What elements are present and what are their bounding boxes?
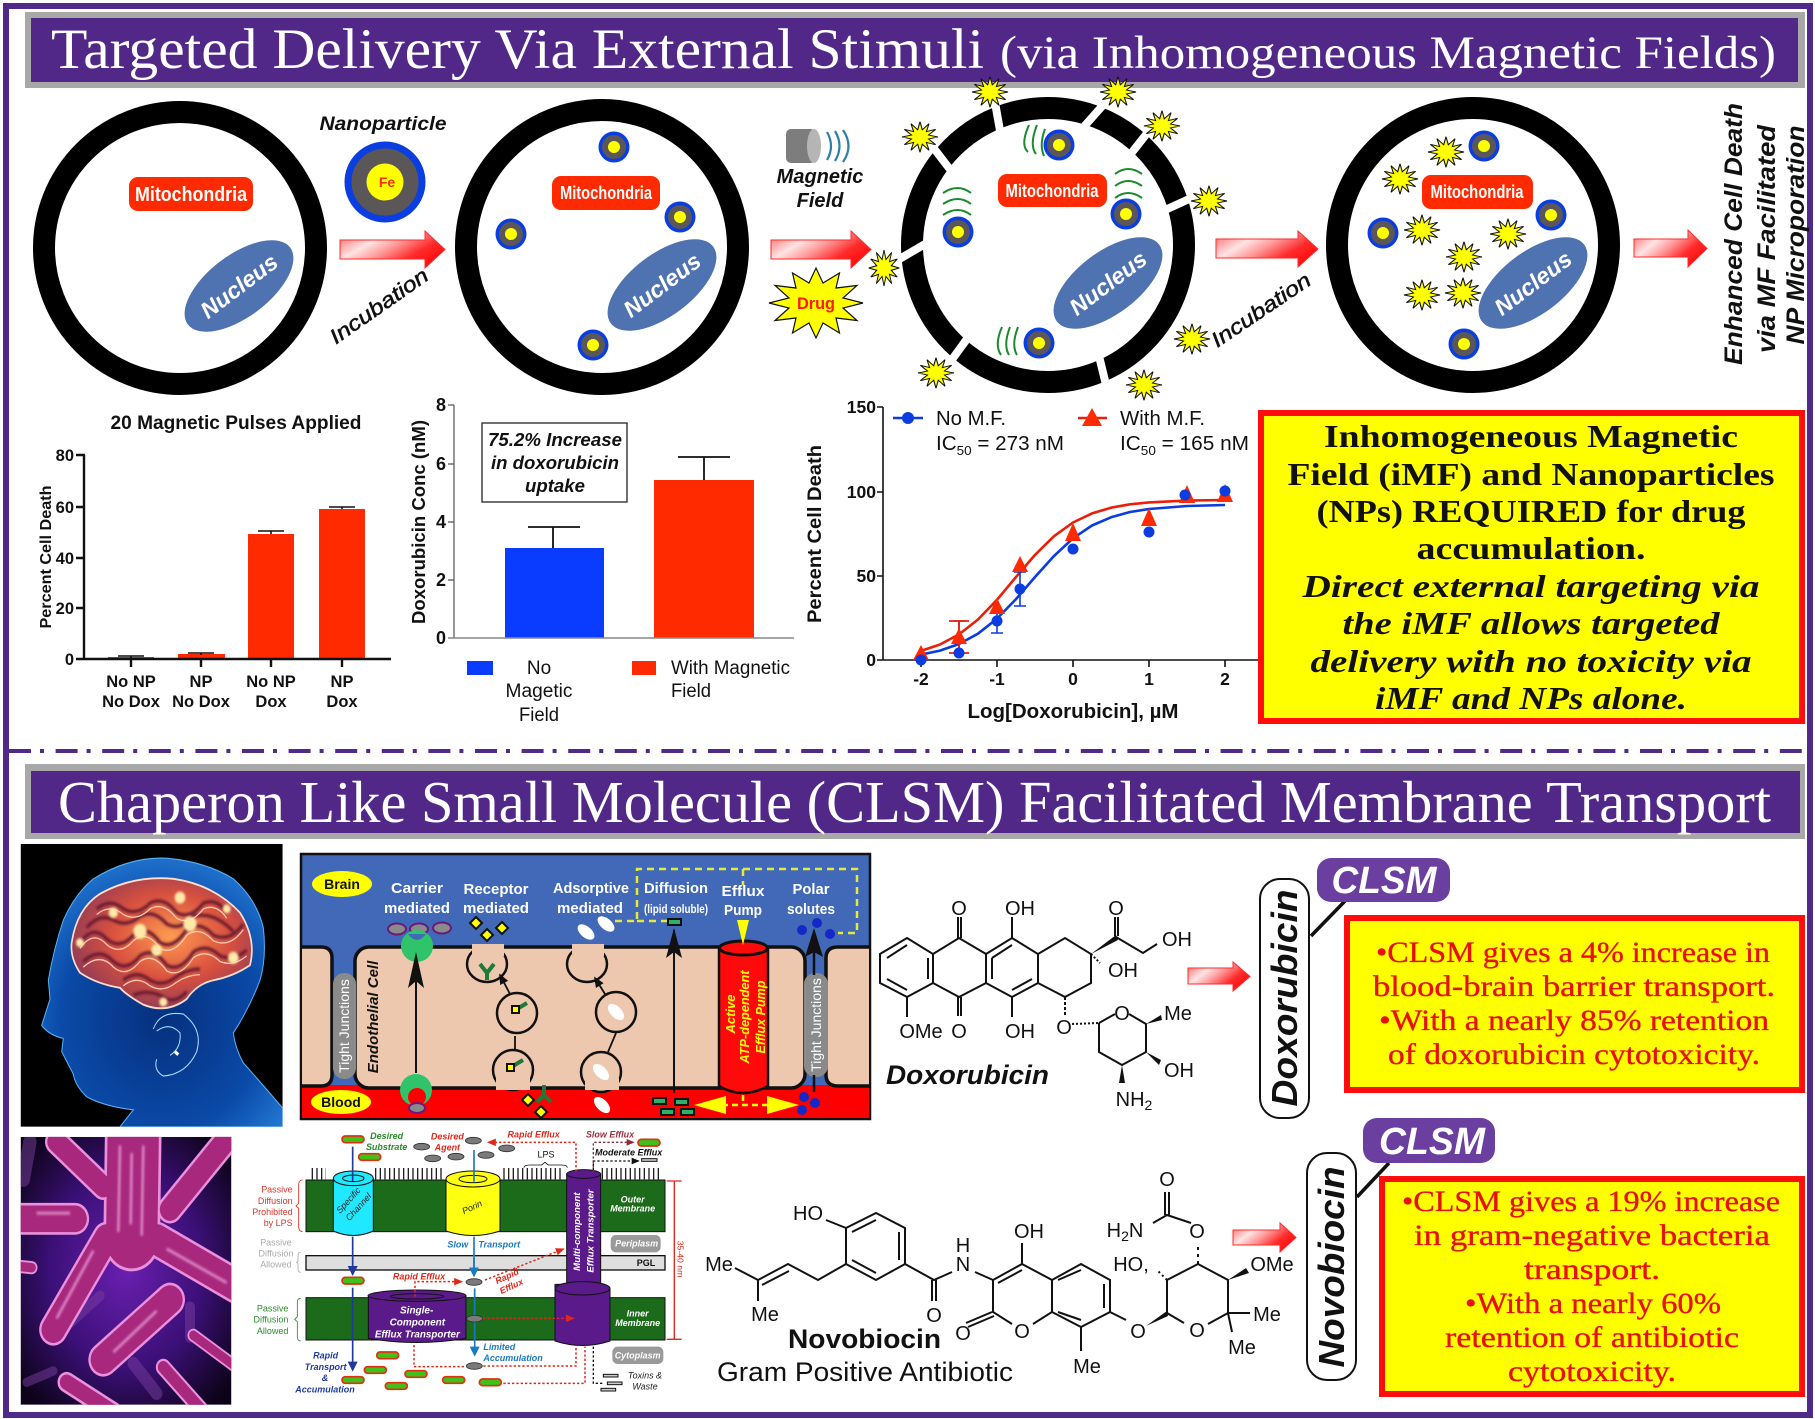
bar chart: percent cell death: No NP bbox=[106, 673, 156, 691]
arrow: doxorubicin to result bbox=[1188, 962, 1250, 991]
outcome text: via MF Facilitated bbox=[1753, 124, 1781, 353]
mitochondria label: Mitochondria bbox=[1430, 182, 1524, 202]
chemical structure: doxorubicin: OH bbox=[1108, 960, 1138, 982]
brain and blood labels: Brain bbox=[324, 876, 360, 892]
callout: iMF and NPs required: Direct external targeting via bbox=[1301, 568, 1760, 604]
result box: novobiocin: retention of antibiotic bbox=[1445, 1321, 1739, 1354]
compartment labels: PGL bbox=[637, 1258, 656, 1268]
specific channel: Channel bbox=[344, 1190, 374, 1223]
legend bbox=[893, 408, 1249, 458]
efflux pump: ATP-dependent bbox=[737, 970, 752, 1064]
flow labels bbox=[294, 1130, 663, 1394]
flow labels: Accumulation bbox=[294, 1384, 355, 1394]
flow labels: LPS bbox=[538, 1149, 554, 1159]
efflux pump: Efflux Pump bbox=[753, 980, 768, 1054]
flow labels: Rapid bbox=[494, 1266, 521, 1286]
callout: iMF and NPs required bbox=[1261, 413, 1802, 721]
endothelial cells bbox=[302, 947, 869, 1088]
pill: doxorubicin: Doxorubicin bbox=[1264, 890, 1305, 1106]
arrow: incubation 2 bbox=[1216, 231, 1318, 267]
flow labels: Transport bbox=[478, 1240, 521, 1250]
result box: novobiocin: cytotoxicity. bbox=[1508, 1355, 1676, 1388]
callout: iMF and NPs required: delivery with no toxicity via bbox=[1310, 643, 1752, 679]
efflux pump: Active bbox=[723, 994, 738, 1035]
label: incubation 1: Incubation bbox=[326, 264, 433, 349]
route labels: Adsorptive bbox=[553, 880, 629, 897]
tight junctions: Tight Junctions bbox=[336, 979, 352, 1073]
specific channel: Specific bbox=[334, 1185, 363, 1215]
panel: cell before incubation bbox=[44, 112, 316, 384]
name: doxorubicin: Doxorubicin bbox=[886, 1060, 1049, 1090]
label: magnetic field bbox=[777, 166, 863, 212]
dose response chart: 50 bbox=[857, 566, 876, 586]
arrow: to outcome bbox=[1634, 230, 1707, 267]
nucleus bbox=[592, 222, 732, 348]
icon: magnet field source bbox=[786, 129, 848, 163]
bar chart: percent cell death: Dox bbox=[255, 693, 287, 711]
legend: Field bbox=[519, 705, 559, 726]
chemical structure: novobiocin: O bbox=[1189, 1320, 1205, 1342]
result box: doxorubicin bbox=[1347, 918, 1802, 1090]
red triangle data points bbox=[913, 484, 1233, 660]
dose response chart: 1 bbox=[1144, 669, 1154, 689]
legend: = 165 nM bbox=[1156, 433, 1249, 455]
chemical structure: novobiocin: O bbox=[1189, 1221, 1205, 1243]
flow labels: Rapid bbox=[313, 1350, 339, 1360]
porin: Porin bbox=[460, 1198, 484, 1216]
chemical structure: novobiocin: O bbox=[926, 1305, 942, 1327]
panel: cell with nanoparticles bbox=[466, 110, 738, 384]
legend: No bbox=[527, 658, 551, 679]
panel: porated cell under magnetic field bbox=[869, 77, 1227, 400]
title banner: targeted delivery: Targeted Delivery Via External Stimuli bbox=[51, 18, 984, 81]
chemical structure: novobiocin: Me bbox=[1253, 1304, 1281, 1326]
bar chart: doxorubicin concentration: 4 bbox=[436, 512, 446, 532]
side labels: Passive bbox=[261, 1185, 293, 1195]
panel: cell with drug accumulated bbox=[1337, 108, 1609, 382]
route labels: mediated bbox=[384, 900, 450, 917]
chemical structure: doxorubicin: O bbox=[1114, 1003, 1130, 1025]
dose response chart: 0 bbox=[866, 650, 876, 670]
side labels: Diffusion bbox=[258, 1196, 293, 1206]
multi-component efflux transporter: Multi-component bbox=[572, 1191, 582, 1271]
nucleus bbox=[1463, 220, 1603, 346]
chemical structure: novobiocin: N bbox=[1129, 1220, 1143, 1242]
nanoparticles with vibration waves bbox=[942, 125, 1142, 358]
chemical structure: doxorubicin: OH bbox=[1005, 898, 1035, 920]
pill: novobiocin: Novobiocin bbox=[1311, 1166, 1352, 1368]
bar chart: doxorubicin concentration: 0 bbox=[436, 628, 446, 648]
badge: CLSM for novobiocin: CLSM bbox=[1379, 1121, 1486, 1163]
porin bbox=[446, 1171, 500, 1235]
image: rod-shaped bacteria bbox=[20, 1136, 232, 1405]
legend bbox=[467, 658, 790, 726]
nanoparticle diagram: Nanoparticle bbox=[320, 114, 447, 135]
callout: 75.2% increase: 75.2% Increase bbox=[488, 429, 622, 450]
chemical structure: doxorubicin: O bbox=[1108, 898, 1124, 920]
legend: 50 bbox=[1141, 443, 1156, 458]
single-component efflux transporter: Efflux Transporter bbox=[375, 1330, 461, 1341]
title banner: CLSM: Chaperon Like Small Molecule (CLSM) Facilitated Membrane Transport bbox=[58, 769, 1772, 835]
flow labels: Slow Efflux bbox=[586, 1130, 635, 1140]
callout line: novobiocin bbox=[1357, 1163, 1389, 1197]
result box: novobiocin: •With a nearly 60% bbox=[1465, 1287, 1721, 1320]
nucleus: Nucleus bbox=[195, 249, 283, 323]
flow labels: Limited bbox=[483, 1342, 516, 1352]
nucleus: Nucleus bbox=[618, 248, 706, 322]
chemical structure: doxorubicin: Me bbox=[1164, 1003, 1192, 1025]
outcome text bbox=[1720, 103, 1810, 365]
side labels: Passive bbox=[260, 1238, 292, 1248]
legend: With M.F. bbox=[1120, 408, 1205, 430]
bar chart: percent cell death: Percent Cell Death bbox=[38, 486, 55, 628]
flow labels: Rapid Efflux bbox=[508, 1130, 561, 1140]
single-component efflux transporter bbox=[368, 1290, 466, 1342]
dose response chart: 100 bbox=[847, 482, 876, 502]
arrow: magnetic field bbox=[771, 231, 871, 268]
chemical structure: novobiocin: OH bbox=[1014, 1221, 1044, 1243]
brain and blood labels bbox=[311, 871, 372, 1114]
bar chart: percent cell death: NP bbox=[190, 673, 212, 691]
flow labels: Accumulation bbox=[482, 1353, 543, 1363]
side labels bbox=[252, 1185, 293, 1336]
nanoparticles bbox=[1368, 130, 1566, 360]
flow labels: Desired bbox=[370, 1131, 404, 1141]
arrow: incubation 1 bbox=[340, 231, 445, 268]
side labels: Allowed bbox=[260, 1260, 292, 1270]
callout line: doxorubicin bbox=[1311, 901, 1345, 936]
arrow: novobiocin to result bbox=[1233, 1223, 1296, 1252]
drug stars bbox=[1382, 137, 1526, 310]
route labels bbox=[384, 880, 835, 919]
flow labels: & bbox=[322, 1373, 328, 1383]
polar solutes route bbox=[797, 918, 835, 1115]
dose response chart: -2 bbox=[913, 669, 929, 689]
legend: No M.F. bbox=[936, 408, 1006, 430]
side labels: Allowed bbox=[257, 1326, 288, 1336]
bar chart: doxorubicin concentration: 2 bbox=[436, 570, 446, 590]
mitochondria label bbox=[552, 176, 660, 210]
chemical structure: novobiocin: H bbox=[1107, 1220, 1121, 1242]
route labels: Carrier bbox=[391, 880, 443, 897]
name: novobiocin: Novobiocin bbox=[788, 1324, 941, 1354]
diffusion route bbox=[653, 919, 694, 1115]
chemical structure: doxorubicin: NH bbox=[1116, 1089, 1145, 1111]
bar chart: doxorubicin concentration bbox=[409, 395, 794, 726]
nanoparticles bbox=[496, 132, 696, 360]
mitochondria label bbox=[129, 177, 253, 211]
side labels: Passive bbox=[257, 1304, 288, 1314]
result box: novobiocin: in gram-negative bacteria bbox=[1414, 1219, 1770, 1252]
route labels: Pump bbox=[724, 902, 762, 919]
chemical structure: novobiocin: N bbox=[956, 1254, 970, 1276]
diagram: blood-brain barrier: Endothelial Cell bbox=[365, 960, 382, 1073]
title banner: targeted delivery: (via Inhomogeneous Magnetic Fields) bbox=[1000, 27, 1776, 79]
bar chart: percent cell death: 0 bbox=[65, 651, 74, 669]
label: magnetic field: Magnetic bbox=[777, 166, 863, 188]
compartment labels: Waste bbox=[632, 1381, 658, 1391]
adsorptive mediated route bbox=[567, 913, 636, 1116]
chemical structure: novobiocin: 2 bbox=[1121, 1228, 1129, 1244]
subtitle: gram positive antibiotic: Gram Positive Antibiotic bbox=[717, 1357, 1013, 1387]
bar chart: percent cell death: No Dox bbox=[102, 693, 161, 711]
nucleus: Nucleus bbox=[1489, 246, 1577, 320]
chemical structure: doxorubicin: O bbox=[1056, 1017, 1072, 1039]
legend: IC bbox=[1120, 433, 1140, 455]
dose response chart: 150 bbox=[847, 397, 876, 417]
chemical structure: novobiocin: O bbox=[1130, 1321, 1146, 1343]
chemical structure: novobiocin: HO bbox=[793, 1203, 823, 1225]
bar chart: doxorubicin concentration: 6 bbox=[436, 454, 446, 474]
flow labels: Inner bbox=[627, 1309, 649, 1319]
bar chart: doxorubicin concentration: 8 bbox=[436, 395, 446, 415]
label: incubation 2: Incubation bbox=[1207, 269, 1315, 352]
callout: iMF and NPs required: the iMF allows targeted bbox=[1342, 605, 1721, 641]
callout: iMF and NPs required: Inhomogeneous Magnetic bbox=[1324, 418, 1738, 454]
tight junctions: Tight Junctions bbox=[808, 978, 824, 1072]
chemical structure: doxorubicin: O bbox=[951, 1021, 967, 1043]
result box: doxorubicin: •With a nearly 85% retention bbox=[1379, 1004, 1769, 1037]
badge: CLSM for doxorubicin: CLSM bbox=[1332, 860, 1438, 902]
route labels: Diffusion bbox=[644, 880, 708, 897]
chemical structure: doxorubicin: OH bbox=[1164, 1060, 1194, 1082]
chemical structure: novobiocin: H bbox=[956, 1235, 970, 1257]
bar chart: percent cell death: 40 bbox=[56, 550, 74, 568]
route labels: Receptor bbox=[464, 881, 529, 898]
chemical structure: novobiocin: HO, bbox=[1113, 1254, 1149, 1276]
agent ellipses bbox=[414, 1137, 515, 1369]
chemical structure: doxorubicin: OH bbox=[1162, 929, 1192, 951]
chemical structure: doxorubicin bbox=[880, 898, 1194, 1113]
nucleus bbox=[169, 223, 309, 349]
flow labels: Moderate Efflux bbox=[595, 1148, 663, 1158]
compartment labels: Toxins & bbox=[628, 1370, 662, 1380]
flow labels: Outer bbox=[621, 1194, 645, 1204]
chemical structure: novobiocin: Me bbox=[705, 1254, 733, 1276]
compartment labels: Periplasm bbox=[615, 1239, 658, 1249]
chemical structure: novobiocin: Me bbox=[1228, 1337, 1256, 1359]
callout: iMF and NPs required: Field (iMF) and Nanoparticles bbox=[1288, 456, 1774, 492]
diagram: blood-brain barrier bbox=[301, 854, 870, 1119]
bar chart: percent cell death: NP bbox=[331, 673, 353, 691]
chemical structure: novobiocin: Me bbox=[1073, 1356, 1101, 1378]
dose response chart bbox=[804, 397, 1258, 723]
compartment labels: 35-40 nm bbox=[676, 1241, 686, 1277]
chemical structure: novobiocin: O bbox=[1014, 1321, 1030, 1343]
mitochondria label: Mitochondria bbox=[135, 184, 248, 206]
callout: 75.2% increase bbox=[482, 423, 627, 502]
bar chart: percent cell death: No Dox bbox=[172, 693, 231, 711]
drug stars entering pores bbox=[869, 77, 1227, 400]
callout: 75.2% increase: in doxorubicin bbox=[491, 452, 619, 473]
dose response chart: -1 bbox=[989, 669, 1005, 689]
single-component efflux transporter: Component bbox=[390, 1318, 446, 1329]
diagram: gram-negative bacterial envelope bbox=[252, 1130, 686, 1394]
specific channel bbox=[333, 1171, 374, 1235]
result box: novobiocin bbox=[1382, 1179, 1802, 1394]
bar chart: percent cell death: Dox bbox=[326, 693, 358, 711]
chemical structure: doxorubicin: OMe bbox=[899, 1021, 943, 1043]
drug starburst: Drug bbox=[797, 294, 835, 313]
result box: novobiocin: •CLSM gives a 19% increase bbox=[1402, 1185, 1780, 1218]
side labels: Prohibited bbox=[252, 1207, 293, 1217]
legend: With Magnetic bbox=[671, 658, 790, 679]
ear bbox=[153, 1013, 198, 1076]
chemical structure: novobiocin: Me bbox=[751, 1304, 779, 1326]
legend: Field bbox=[671, 681, 711, 702]
flow labels: Rapid Efflux bbox=[393, 1272, 446, 1282]
outcome text: Enhanced Cell Death bbox=[1720, 103, 1748, 365]
multi-component efflux transporter: Efflux Transporter bbox=[585, 1189, 595, 1273]
legend: 50 bbox=[957, 443, 972, 458]
label: magnetic field: Field bbox=[797, 190, 844, 212]
drug starburst bbox=[769, 268, 863, 338]
route labels: mediated bbox=[557, 900, 623, 917]
chemical structure: novobiocin: O bbox=[1159, 1169, 1175, 1191]
outcome text: NP Microporation bbox=[1782, 126, 1810, 344]
chemical structure: doxorubicin: 2 bbox=[1145, 1097, 1153, 1113]
bar chart: percent cell death: 80 bbox=[56, 447, 74, 465]
bar chart: percent cell death: 20 bbox=[56, 600, 74, 618]
bar chart: doxorubicin concentration: Doxorubicin Conc (nM) bbox=[409, 420, 429, 624]
route labels: Polar bbox=[792, 881, 830, 898]
bar chart: percent cell death: No NP bbox=[246, 673, 296, 691]
result box: novobiocin: transport. bbox=[1524, 1253, 1660, 1286]
chemical structure: novobiocin: O bbox=[955, 1323, 971, 1345]
bar chart: percent cell death: 60 bbox=[56, 499, 74, 517]
chemical structure: doxorubicin: O bbox=[951, 898, 967, 920]
chemical structure: novobiocin bbox=[705, 1169, 1294, 1387]
blue circle data points bbox=[916, 486, 1230, 666]
callout: iMF and NPs required: iMF and NPs alone. bbox=[1375, 680, 1687, 716]
dose response chart: 0 bbox=[1068, 669, 1078, 689]
transport arrows bbox=[353, 1142, 638, 1383]
flow labels: Slow bbox=[447, 1240, 469, 1250]
nanoparticle diagram bbox=[320, 114, 447, 219]
callout: iMF and NPs required: accumulation. bbox=[1416, 530, 1646, 566]
title banner: targeted delivery bbox=[25, 12, 1805, 88]
side labels: Diffusion bbox=[254, 1315, 288, 1325]
flow labels: Transport bbox=[305, 1362, 348, 1372]
route labels: Efflux bbox=[722, 883, 765, 900]
mitochondria label: Mitochondria bbox=[560, 183, 653, 203]
flow labels: Membrane bbox=[610, 1204, 655, 1214]
receptor mediated route bbox=[467, 917, 551, 1118]
flow labels: Desired bbox=[431, 1131, 464, 1141]
carrier mediated route bbox=[388, 922, 451, 1113]
result box: doxorubicin: of doxorubicin cytotoxicity. bbox=[1388, 1038, 1760, 1071]
legend: IC bbox=[936, 433, 956, 455]
chemical structure: novobiocin: OMe bbox=[1250, 1254, 1294, 1276]
nanoparticle diagram: Fe bbox=[379, 174, 395, 190]
tight junctions bbox=[333, 973, 828, 1079]
callout: 75.2% increase: uptake bbox=[525, 475, 585, 496]
dose response chart: Percent Cell Death bbox=[804, 445, 826, 623]
bar chart: percent cell death: 20 Magnetic Pulses Applied bbox=[110, 413, 362, 434]
side labels: Diffusion bbox=[259, 1249, 293, 1259]
bar chart: percent cell death bbox=[38, 413, 391, 711]
legend: Magetic bbox=[506, 681, 572, 702]
callout: iMF and NPs required: (NPs) REQUIRED for drug bbox=[1316, 493, 1746, 529]
braces bbox=[295, 1162, 682, 1341]
mitochondria label bbox=[1422, 175, 1533, 209]
image: human head with glowing brain bbox=[21, 844, 283, 1127]
brain and blood labels: Blood bbox=[321, 1094, 361, 1110]
side labels: by LPS bbox=[264, 1218, 293, 1228]
flow labels: Efflux bbox=[498, 1276, 526, 1296]
route labels: mediated bbox=[463, 900, 529, 917]
dose response chart: 2 bbox=[1220, 669, 1230, 689]
nucleus: Nucleus bbox=[1064, 246, 1152, 320]
chemical structure: doxorubicin: OH bbox=[1005, 1021, 1035, 1043]
multi-component efflux transporter bbox=[555, 1170, 610, 1345]
result box: doxorubicin: blood-brain barrier transport. bbox=[1373, 970, 1775, 1003]
route labels: (lipid soluble) bbox=[644, 904, 708, 916]
dose response chart: Log[Doxorubicin], µM bbox=[968, 701, 1178, 723]
mitochondria label: Mitochondria bbox=[1006, 181, 1099, 201]
toxin bars bbox=[601, 1159, 657, 1391]
brain bbox=[71, 878, 252, 1008]
substrate capsules bbox=[342, 1136, 660, 1389]
single-component efflux transporter: Single- bbox=[400, 1305, 434, 1316]
compartment labels: Cytoplasm bbox=[615, 1350, 661, 1360]
legend: = 273 nM bbox=[972, 433, 1064, 455]
route labels: solutes bbox=[787, 901, 835, 918]
nucleus bbox=[1038, 220, 1178, 346]
compartment labels bbox=[611, 1235, 686, 1391]
result box: doxorubicin: •CLSM gives a 4% increase in bbox=[1376, 936, 1770, 969]
flow labels: Membrane bbox=[615, 1318, 660, 1328]
efflux pump bbox=[694, 920, 799, 1114]
mitochondria label bbox=[998, 174, 1107, 207]
flow labels: Agent bbox=[434, 1143, 461, 1153]
flow labels: Substrate bbox=[366, 1142, 407, 1152]
